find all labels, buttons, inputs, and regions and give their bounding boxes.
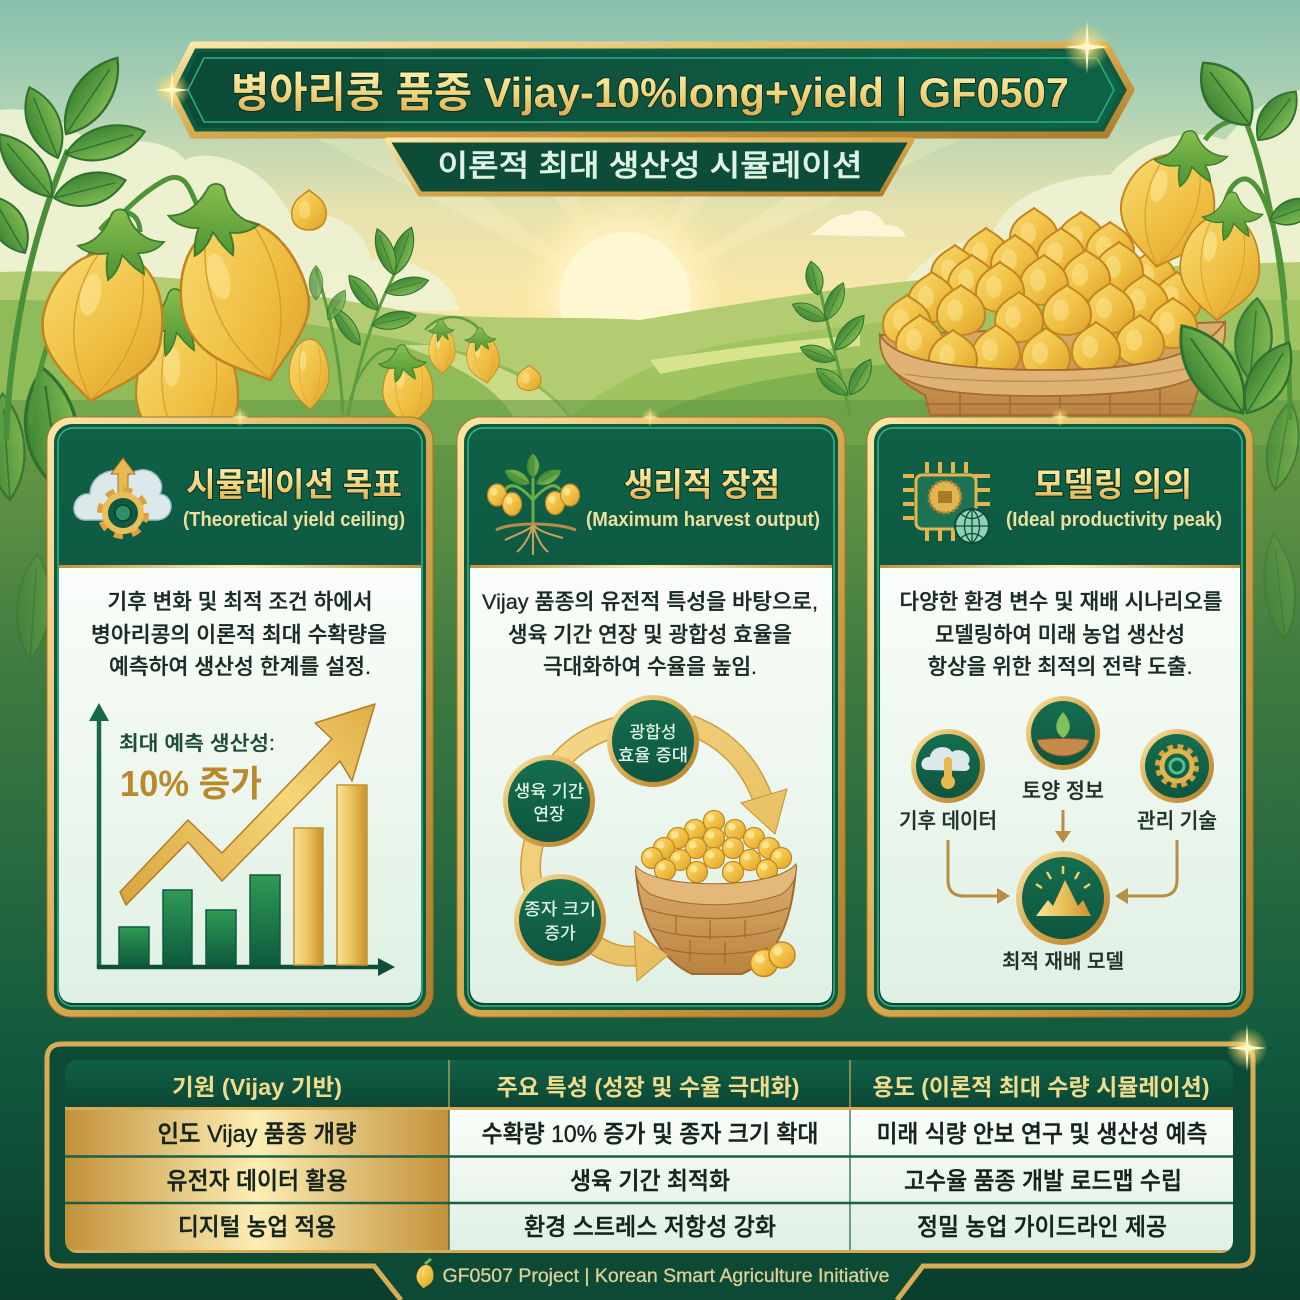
floating chickpea [292,190,326,230]
icon: chip and globe [903,462,990,543]
arrow ring [531,725,787,981]
lower left foliage [0,150,1300,661]
description [900,590,1222,679]
sparkles on banner [154,20,1110,111]
flow: connecting arrows [948,810,1177,904]
right small plant [789,260,878,415]
description [91,590,387,679]
description: Vijay 품종의 유전적 특성을 바탕으로, [482,590,818,614]
node: photosynthesis: 광합성 [630,723,676,742]
table header: 기원 (Vijay 기반) [172,1074,342,1100]
clouds [0,90,1300,320]
right pods [1108,131,1300,426]
node: growth period [503,755,595,847]
table row 3: 정밀 농업 가이드라인 제공 [917,1214,1167,1241]
callout: max predicted productivity [119,732,275,804]
node: growth period: 연장 [533,805,565,824]
node: climate data [899,729,997,833]
table header [65,1060,1233,1110]
panel: summary table [47,1044,1253,1300]
growth arrow [120,704,375,905]
label: 기후 데이터 [899,810,997,833]
node: seed size: 종자 크기 [524,900,596,919]
diagram: growth cycle [503,695,796,981]
heading: 모델링 의의 [1034,466,1192,503]
basket of chickpeas [636,810,796,976]
description: 극대화하여 수율을 높임. [543,655,757,679]
label: 최적 재배 모델 [1002,950,1124,973]
table row 1 [158,1121,1208,1148]
subheading: (Ideal productivity peak) [1006,509,1222,531]
description: 예측하여 생산성 한계를 설정. [109,655,371,679]
node: photosynthesis: 효율 증대 [618,746,688,765]
description [482,590,818,679]
table row 1: 미래 식량 안보 연구 및 생산성 예측 [876,1121,1208,1148]
subtitle text: 이론적 최대 생산성 시뮬레이션 [438,150,862,183]
table row 2 [167,1168,1180,1192]
table row 2: 생육 기간 최적화 [570,1168,730,1195]
right chickpea basket [880,208,1225,415]
left pods [28,178,329,465]
sun [510,180,740,410]
right plant and leaves [1186,50,1300,420]
title banner [170,45,1131,135]
panel: simulation goal [47,417,433,1017]
sparkles on cards [231,406,1069,428]
sparkle on table [1226,1024,1268,1072]
node: seed size [514,874,606,966]
subtitle banner [387,140,912,194]
footer text: GF0507 Project | Korean Smart Agriculture Initiative [442,1266,890,1287]
icon: plant with roots [488,453,580,555]
table [65,1060,1233,1253]
node: photosynthesis [607,695,699,787]
table body backgrounds [65,1110,1233,1253]
subheading: (Theoretical yield ceiling) [183,509,405,531]
table row 2: 고수율 품종 개발 로드맵 수립 [904,1168,1182,1195]
table row 1: 인도 Vijay 품종 개량 [158,1121,356,1148]
chart: productivity bars and arrow [89,703,395,976]
description: 모델링하여 미래 농업 생산성 [935,623,1185,647]
callout: max predicted productivity: 10% 증가 [120,763,262,804]
label: 토양 정보 [1022,780,1104,803]
table row 3: 환경 스트레스 저항성 강화 [524,1214,776,1241]
callout: max predicted productivity: 최대 예측 생산성: [119,732,275,755]
icon: bean [415,1259,435,1290]
description: 생육 기간 연장 및 광합성 효율을 [508,623,792,647]
table header: 주요 특성 (성장 및 수율 극대화) [496,1074,800,1100]
node: optimal cultivation model [1002,851,1124,973]
node: management technology [1137,729,1217,833]
node: growth period: 생육 기간 [514,782,584,801]
middle small plants [309,224,541,427]
hills [0,262,1300,470]
left plant [0,48,197,425]
node: soil info [1022,696,1104,803]
node: seed size: 증가 [544,924,576,943]
subheading: (Maximum harvest output) [586,509,820,531]
icon: cloud gear arrow [74,458,171,535]
description: 병아리콩의 이론적 최대 수확량을 [91,623,387,647]
table row 2: 유전자 데이터 활용 [166,1168,348,1195]
title text: 병아리콩 품종 Vijay-10%long+yield | GF0507 [231,69,1069,117]
panel: physiological advantage [457,417,845,1017]
description: 항상을 위한 최적의 전략 도출. [928,655,1192,679]
table header: 용도 (이론적 최대 수량 시뮬레이션) [872,1074,1210,1100]
table row 1: 수확량 10% 증가 및 종자 크기 확대 [482,1121,818,1148]
heading: 생리적 장점 [624,466,780,503]
heading: 시뮬레이션 목표 [186,466,402,503]
label: 관리 기술 [1137,810,1217,833]
description: 다양한 환경 변수 및 재배 시나리오를 [900,590,1222,614]
table row 3 [180,1214,1166,1238]
footer [415,1259,890,1290]
description: 기후 변화 및 최적 조건 하에서 [108,590,372,614]
panel: modeling significance [867,417,1253,1017]
table row 3: 디지털 농업 적용 [178,1214,336,1241]
